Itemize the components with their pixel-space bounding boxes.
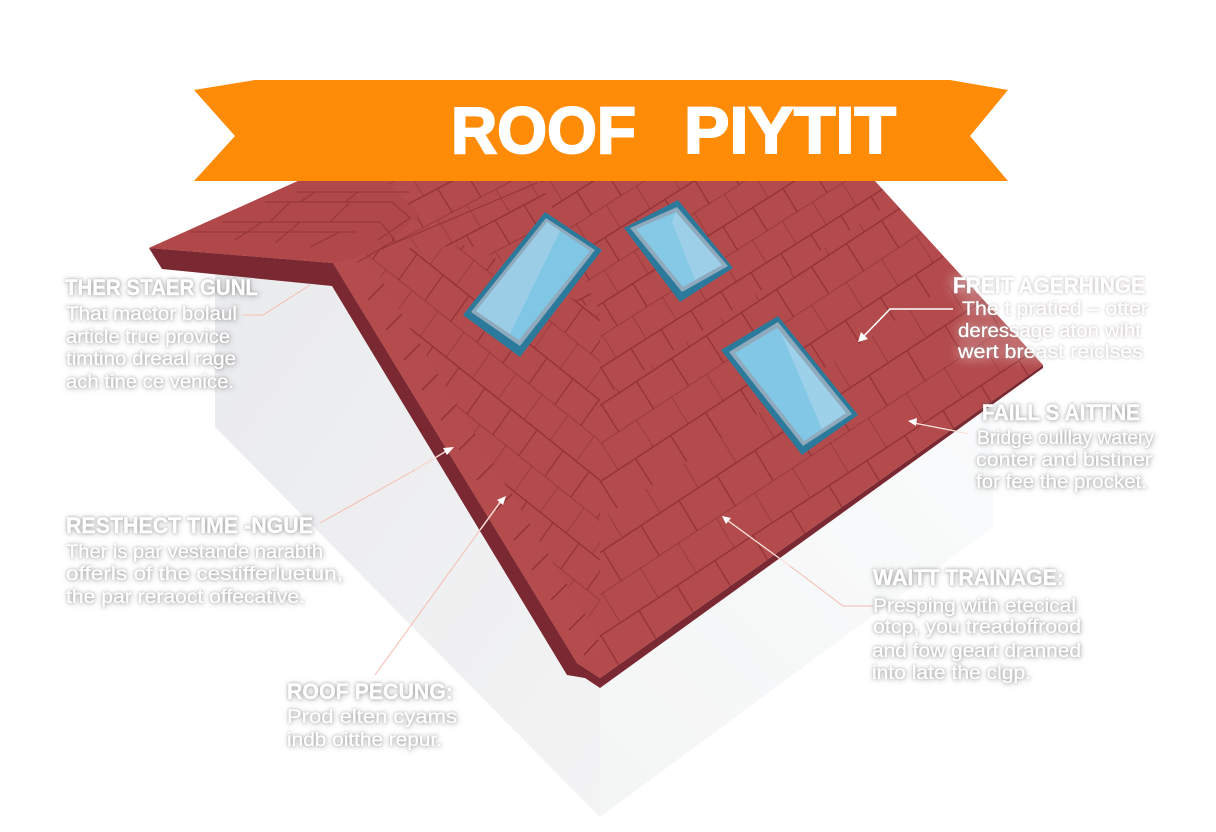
leader arrow: lower right [722,516,873,606]
callout: top left [65,275,258,393]
callout: top left: THER STAER GUNL [65,275,258,300]
leader arrow: middle right [908,418,968,434]
callout: lower right: WAITT TRAINAGE: [873,565,1064,590]
callout: top left: ach tine ce venice. [66,372,234,393]
title banner [194,80,1008,181]
roof edge fascia [149,248,1043,688]
shingles: overhang [149,181,537,263]
callout: roof pecung: Prod elten cyams [287,707,457,728]
callout: top left: article true provice [66,327,230,348]
leader line: top left [243,285,310,315]
callout: top right: wert breast reiclses [957,342,1143,363]
skylight: upper middle [624,200,733,302]
callout: top right: The t pratied – otter [962,299,1149,320]
callout: middle left: Ther is par vestande narabth [66,542,323,563]
roof surface [149,181,1043,678]
callout: middle left: the par reraoct offecative. [66,587,305,608]
shingles: right plane [380,181,1043,678]
callout: roof pecung [287,679,457,751]
callout: middle right: for fee the procket. [976,472,1147,493]
callout: middle right [976,400,1154,493]
callout: lower right: Presping with etecical [873,596,1076,617]
leader arrow: top right [858,309,953,342]
callout: roof pecung: indb oitthe repur. [287,730,442,751]
callout: middle right: conter and bistiner [976,450,1153,471]
skylight: upper left [463,212,602,357]
callout: middle right: FAILL S AITTNE [982,400,1140,425]
callout: middle left: RESTHECT TIME -NGUE [66,513,313,538]
callout: middle right: Bridge oulllay watery [977,428,1154,449]
callout: middle left: offerls of the cestifferluetun, [66,564,343,585]
skylight: lower right [721,316,858,455]
title: PIYTIT [684,93,896,167]
callout: lower right: otcp, you treadoffrood [873,617,1081,638]
callout: lower right [872,565,1081,684]
leader arrow: middle left [320,447,454,523]
leader arrow: lower left [375,496,506,675]
callout: middle left [66,513,343,608]
title: ROOF [451,93,636,167]
callout: top left: That mactor bolaul [66,304,237,325]
callout: top right: FREIT AGERHINGE [953,273,1145,298]
callout: lower right: and fow geart dranned [872,641,1081,662]
callout: top right: deressage aton wiht [958,321,1142,342]
callout: top right [953,273,1149,363]
shingles: left plane [333,245,606,663]
callout: roof pecung: ROOF PECUNG: [287,679,453,704]
roof [149,181,1043,688]
callout: lower right: into late the clgp. [872,663,1031,684]
callout: top left: timtino dreaal rage [66,349,236,370]
building walls [215,274,993,817]
